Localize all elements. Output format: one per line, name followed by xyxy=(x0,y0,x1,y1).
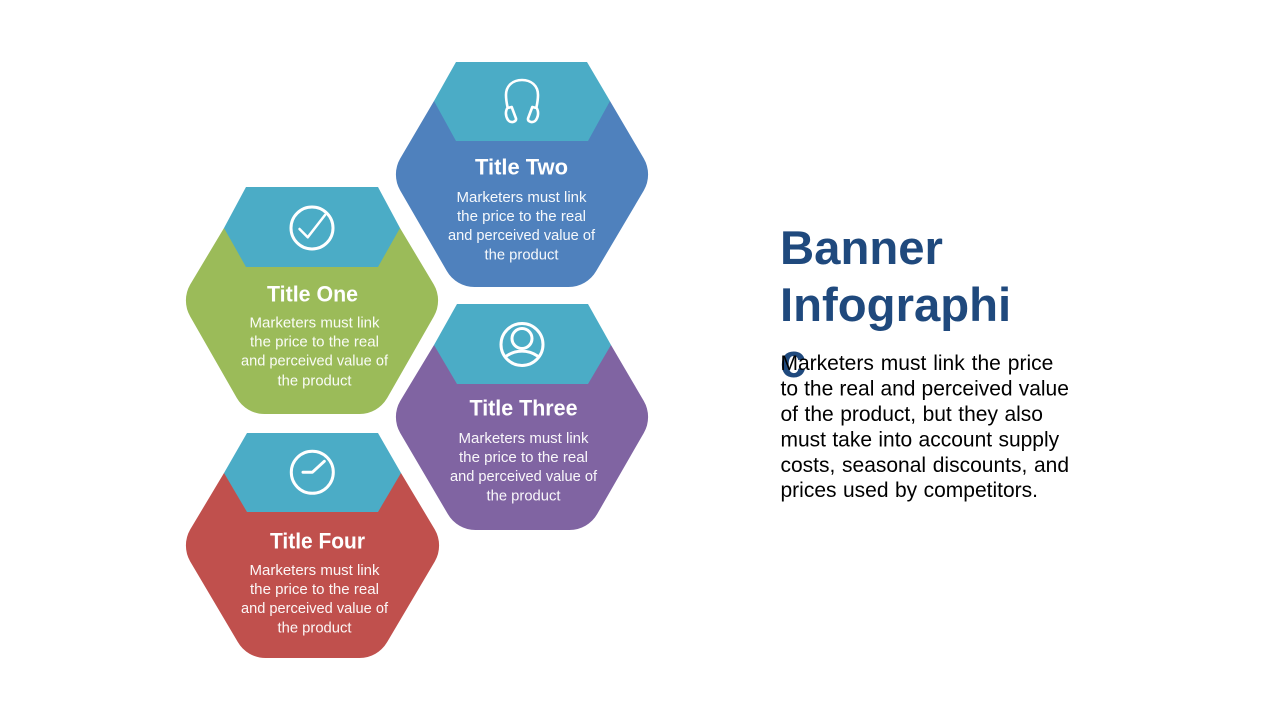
text block: title two description xyxy=(448,190,596,264)
heading: title four: Title Four xyxy=(270,528,365,554)
text block: title two description: Marketers must link xyxy=(456,190,587,206)
text block: title three description xyxy=(450,431,598,504)
text block: description: costs, seasonal discounts, and xyxy=(780,454,1069,477)
panel: hexagon title three xyxy=(396,304,648,530)
heading: title one: Title One xyxy=(267,282,358,306)
title xyxy=(780,222,1011,388)
text block: description: to the real and perceived value xyxy=(780,378,1069,400)
text block: title one description xyxy=(241,316,389,390)
text block: title three description: and perceived value of xyxy=(450,469,598,485)
text block: description: must take into account supply xyxy=(780,428,1060,452)
text block: title three description: the product xyxy=(486,488,560,504)
icon: check mark in circle xyxy=(291,207,333,249)
text block: title one description: and perceived value of xyxy=(241,354,389,370)
text block: title two description: the product xyxy=(484,248,558,264)
text block: title four description xyxy=(241,563,389,636)
text block: description xyxy=(780,352,1069,502)
panel: hexagon title four xyxy=(186,433,439,658)
text block: title one description: Marketers must link xyxy=(250,316,380,332)
heading: title two: Title Two xyxy=(475,154,568,180)
text block: title three description: the price to the real xyxy=(459,450,588,466)
text block: title four description: the product xyxy=(278,620,352,636)
panel: hexagon title two xyxy=(396,62,648,287)
title: c xyxy=(780,335,806,388)
title: Banner xyxy=(780,222,943,275)
icon: headphones xyxy=(506,80,538,122)
heading: title three: Title Three xyxy=(470,396,578,420)
text block: title two description: the price to the real xyxy=(457,209,586,225)
text block: title three description: Marketers must link xyxy=(458,431,589,447)
text block: title four description: Marketers must link xyxy=(250,563,380,579)
text block: description: prices used by competitors. xyxy=(780,479,1038,502)
text block: title two description: and perceived value of xyxy=(448,228,596,244)
text block: title one description: the price to the real xyxy=(250,334,379,350)
title: Infographi xyxy=(780,279,1011,332)
text block: title one description: the product xyxy=(278,374,352,390)
text block: description: of the product, but they also xyxy=(780,403,1043,426)
text block: title four description: the price to the real xyxy=(250,582,379,598)
text block: description: Marketers must link the price xyxy=(780,352,1053,375)
icon: clock xyxy=(291,451,333,493)
panel: hexagon title one xyxy=(186,187,438,414)
icon: user in circle xyxy=(501,324,543,366)
text block: title four description: and perceived value of xyxy=(241,601,389,617)
